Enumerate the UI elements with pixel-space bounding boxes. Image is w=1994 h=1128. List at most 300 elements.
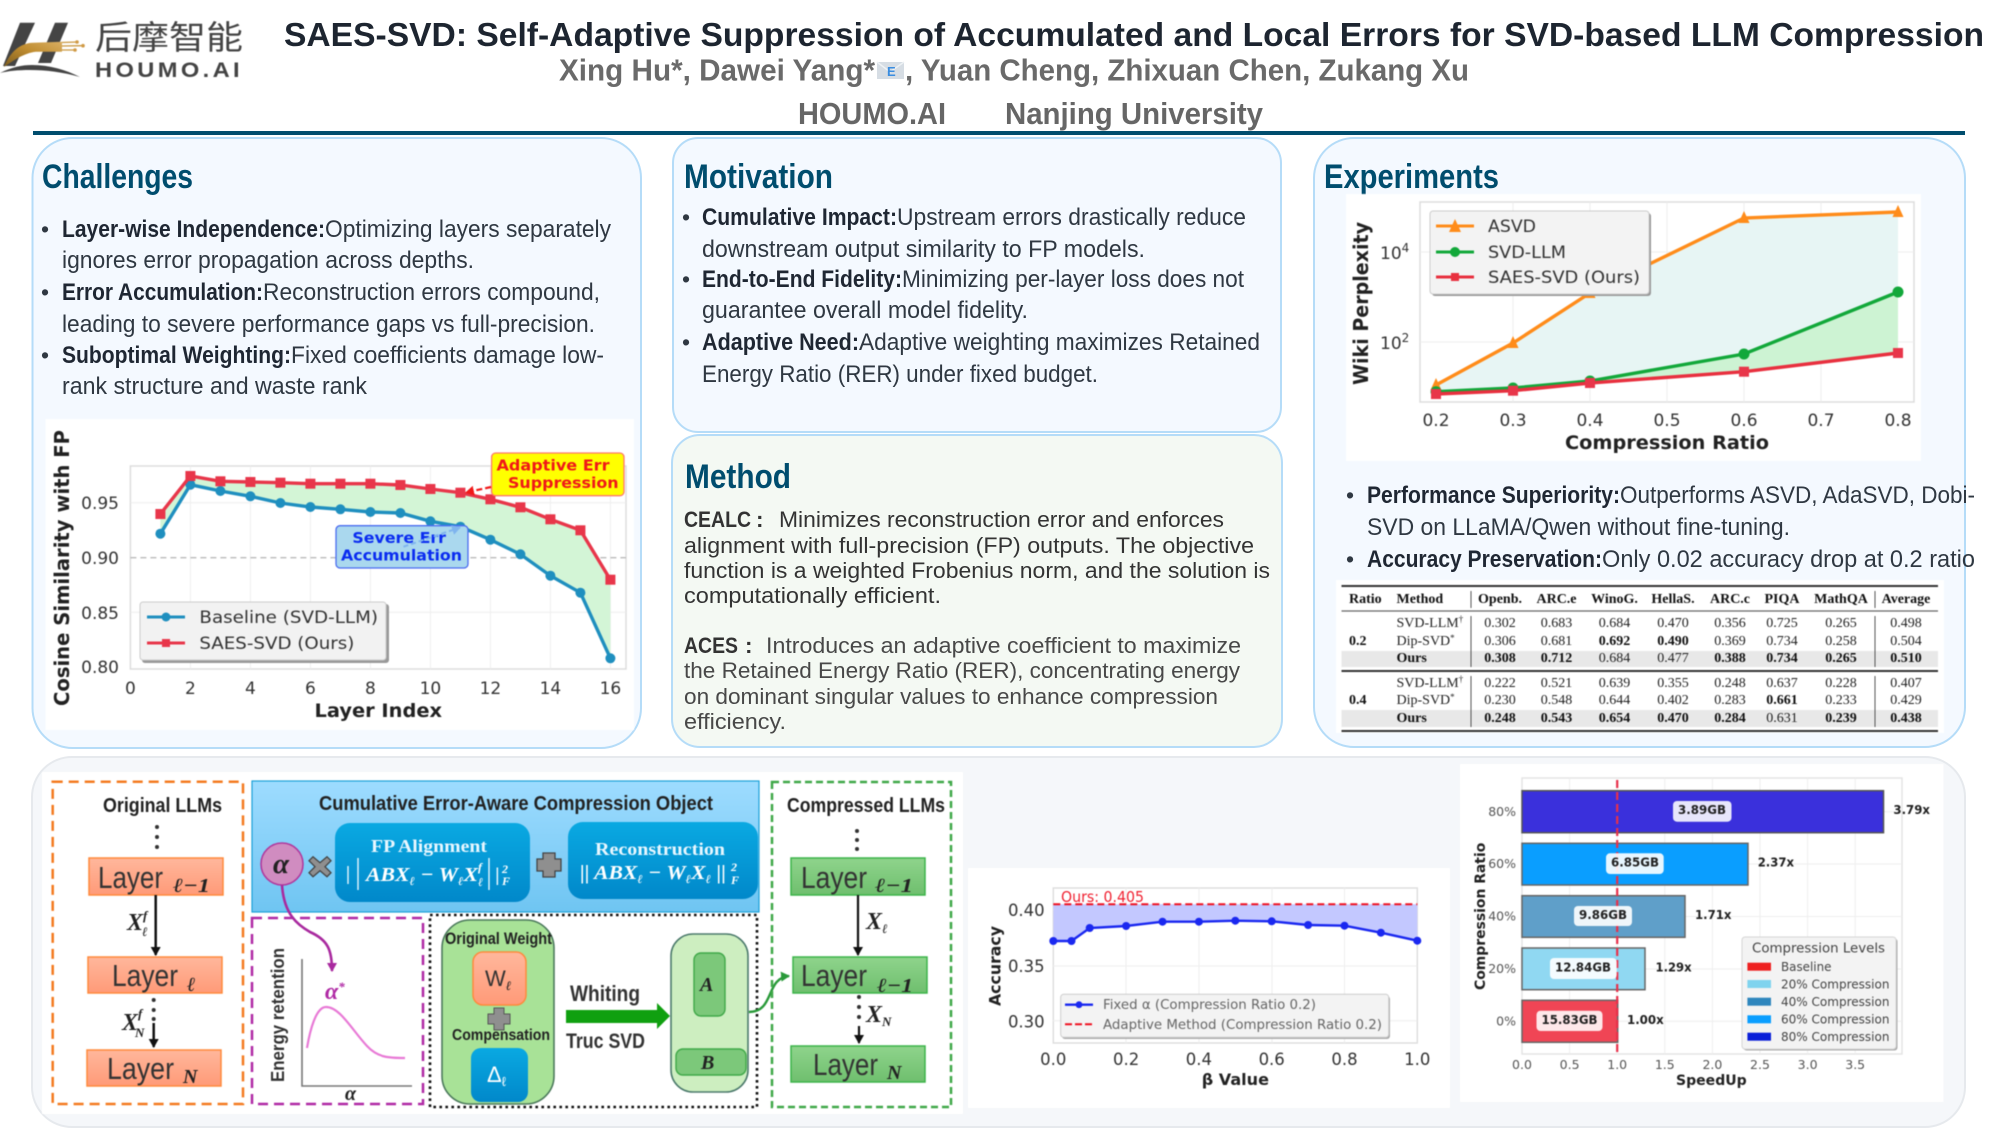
label: X l: ℓ (882, 921, 888, 936)
label: X N: X (866, 1002, 882, 1028)
text block: ACES: ACES (684, 633, 738, 658)
legend: SVD-LLM (1488, 243, 1566, 263)
layer l-1: Layer (801, 860, 867, 895)
fill between SVD-LLM and ours (1436, 292, 1898, 394)
legend (1430, 211, 1651, 296)
x tick labels (1040, 1050, 1430, 1069)
arrow (152, 1023, 155, 1047)
icon: H mark (0, 23, 85, 77)
x axis title: Compression Ratio (1565, 432, 1769, 454)
series: baseline (160, 485, 610, 658)
x tick labels: 6 (305, 679, 316, 699)
table rows: ratio 0.2: 0.369 (1714, 634, 1746, 649)
arrow (858, 1026, 860, 1043)
legend: compression levels: Baseline (1781, 959, 1832, 974)
FP alignment term: f (478, 860, 483, 874)
x tick labels: 0.0 (1040, 1050, 1066, 1069)
label: truc svd: Truc SVD (566, 1030, 645, 1053)
legend (1061, 994, 1390, 1039)
layer N (87, 1050, 221, 1088)
text block: CEALC: Minimizes reconstruction error and enforces (779, 507, 1224, 532)
table rows: ratio 0.4: * (1450, 692, 1455, 702)
arrow: alpha to optimum (282, 885, 332, 971)
authors (559, 54, 1469, 88)
table rows: ratio 0.4: 0.233 (1825, 693, 1857, 708)
table rows: ratio 0.2: 0.265 (1825, 616, 1857, 631)
text block: experiments bullets: SVD on LLaMA/Qwen without fine-tuning. (1367, 514, 1790, 541)
reconstruction term: − W (643, 862, 687, 884)
legend: ASVD (1488, 217, 1536, 237)
layer l-1 second (793, 957, 927, 997)
label: X f N: f (138, 1006, 144, 1021)
y tick labels (1008, 901, 1045, 1032)
y tick labels: 0.30 (1008, 1013, 1045, 1032)
bar: 40% (1522, 896, 1685, 937)
y tick labels: 60% (1488, 856, 1516, 871)
arrow: factors to compressed layer (749, 976, 789, 1012)
heading: Experiments: Experiments (1324, 158, 1499, 196)
x tick labels (125, 679, 621, 699)
table rows: ratio 0.2: 0.504 (1890, 634, 1922, 649)
panel: motivation (673, 138, 1281, 432)
table rows: ratio 0.2: 0.692 (1599, 634, 1630, 649)
text block: experiments bullets (1346, 482, 1975, 573)
table rows: ratio 0.4: † (1459, 674, 1464, 684)
y tick labels: 4 (1402, 241, 1409, 255)
label: X N: N (881, 1014, 892, 1029)
layer l-1 second: Layer (801, 958, 867, 993)
label: X f l: f (143, 908, 149, 923)
reconstruction term: ℓ (706, 872, 711, 886)
reference line: adaptive method (1053, 903, 1417, 905)
text block: CEALC: : (756, 507, 764, 532)
y axis title: Cosine Similarity with FP (50, 430, 74, 706)
table rows: ratio 0.2: Ours (1396, 651, 1427, 666)
speedup labels: 1.29x (1656, 960, 1692, 975)
text block: CEALC: CEALC (684, 507, 751, 532)
original weight and compensation: ℓ (502, 1074, 507, 1089)
FP alignment term: FP Alignment (371, 836, 487, 856)
table rows: ratio 0.2: 0.2 (1349, 634, 1366, 649)
x tick labels: 4 (245, 679, 256, 699)
FP alignment term: | (495, 865, 500, 885)
x tick labels: 0.4 (1576, 411, 1604, 431)
group: weight decomposition (430, 915, 757, 1107)
legend: Baseline (SVD-LLM) (199, 608, 378, 628)
layer N: Layer (107, 1051, 174, 1086)
table header: Average (1882, 592, 1930, 607)
y tick labels: 10 (1380, 334, 1402, 354)
table rows: ratio 0.4: 0.548 (1541, 693, 1572, 708)
callout: adaptive error suppression: Adaptive Err (496, 457, 610, 475)
label: whiting: Whiting (570, 981, 640, 1006)
reconstruction term: || ABX (580, 862, 633, 884)
factors A and B: B (700, 1052, 714, 1074)
table rows: ratio 0.2: 0.388 (1714, 651, 1746, 666)
x tick labels: 0.8 (1331, 1050, 1358, 1069)
table header: WinoG. (1591, 592, 1638, 607)
table rows: ratio 0.2: 0.683 (1541, 616, 1572, 631)
x tick labels (1422, 411, 1912, 431)
speedup labels: 2.37x (1758, 855, 1794, 870)
table rows: ratio 0.4: 0.239 (1825, 711, 1857, 726)
table rows: ratio 0.2: 0.684 (1599, 616, 1630, 631)
text block: motivation bullets: Upstream errors drastically reduce (897, 204, 1246, 231)
speedup labels: 3.79x (1893, 802, 1930, 817)
bar chart: speedup (1460, 764, 1944, 1102)
table rows: ratio 0.4: SVD-LLM (1396, 676, 1459, 691)
icon: alpha coefficient: α (273, 848, 290, 880)
text block: experiments bullets: • (1346, 546, 1354, 572)
text block: CEALC (684, 507, 1270, 608)
label: X f l: X (126, 910, 144, 936)
legend: compression levels (1742, 937, 1898, 1050)
text block: CEALC: function is a weighted Frobenius norm, and the solution is (684, 558, 1270, 583)
FP alignment term: 2 (501, 862, 508, 876)
group: energy retention: * (338, 979, 345, 994)
layer l: ℓ (187, 974, 196, 996)
group: energy retention (252, 918, 423, 1105)
layer l-1 second: ℓ−1 (877, 975, 913, 997)
annotation: ours value: Ours: 0.405 (1061, 888, 1144, 906)
x tick labels: 1.5 (1655, 1057, 1675, 1072)
legend: compression levels: 80% Compression (1781, 1029, 1890, 1044)
text block: challenges bullets: ignores error propagation across depths. (62, 247, 474, 274)
text block: motivation bullets: Energy Ratio (RER) under fixed budget. (702, 361, 1098, 388)
reconstruction term: X (690, 862, 706, 884)
text block: challenges bullets: • (41, 342, 49, 368)
FP alignment term: ABX (366, 864, 406, 886)
text block: ACES: Introduces an adaptive coefficient to maximize (766, 633, 1241, 658)
text block: motivation bullets (682, 204, 1260, 388)
arrow: green (566, 1003, 670, 1029)
y axis title: Compression Ratio (1473, 842, 1489, 990)
legend (140, 602, 389, 663)
table rows: ratio 0.4: 0.4 (1349, 693, 1366, 708)
table rows: ratio 0.2: 0.734 (1766, 651, 1798, 666)
affiliations: HOUMO.AI (798, 97, 946, 131)
logo wordmark Chinese: 后摩智能 (95, 19, 243, 56)
text block: challenges bullets: Optimizing layers separately (325, 216, 611, 243)
text block: motivation bullets: • (682, 204, 690, 230)
icon: multiply (309, 857, 331, 877)
table rows: ratio 0.4 (1349, 674, 1922, 726)
y tick labels: 0.80 (81, 658, 119, 678)
table rows: ratio 0.4: 0.230 (1484, 693, 1516, 708)
legend: compression levels: 40% Compression (1781, 994, 1890, 1009)
original weight and compensation: W (485, 966, 506, 991)
y axis title: Wiki Perplexity (1349, 222, 1373, 385)
FP alignment term: − W (415, 864, 459, 886)
y tick labels: 0.90 (81, 549, 119, 569)
y tick labels: 10 (1380, 244, 1402, 264)
callout: severe error accumulation (336, 526, 468, 568)
layer l: Layer (112, 958, 178, 993)
text block: experiments bullets: Performance Superiority: (1367, 482, 1620, 509)
x tick labels: 0 (125, 679, 136, 699)
label: X f N (121, 1006, 145, 1040)
x axis title: SpeedUp (1676, 1073, 1747, 1089)
table rows: ratio 0.4: 0.228 (1825, 676, 1857, 691)
text block: CEALC: computationally efficient. (684, 583, 941, 608)
table rows: ratio 0.4: 0.470 (1657, 711, 1689, 726)
legend: compression levels: Compression Levels (1752, 942, 1885, 957)
text block: experiments bullets: Accuracy Preservation: (1367, 546, 1602, 573)
x tick labels: 2.0 (1702, 1057, 1722, 1072)
x tick labels (1512, 1057, 1865, 1072)
FP alignment term: X (462, 864, 479, 886)
table header: ARC.c (1710, 592, 1750, 607)
table rows: ratio 0.2 (1349, 614, 1922, 666)
x tick labels: 0.8 (1884, 411, 1912, 431)
text block: motivation bullets: Adaptive weighting maximizes Retained (859, 329, 1260, 356)
table rows: ratio 0.4: 0.644 (1599, 693, 1630, 708)
table rows: ratio 0.4: 0.407 (1890, 676, 1922, 691)
text block: motivation bullets: End-to-End Fidelity: (702, 266, 902, 293)
text block: challenges bullets: • (41, 279, 49, 305)
table rows: ratio 0.4: Ours (1396, 711, 1427, 726)
table rows: ratio 0.4: Dip-SVD (1396, 693, 1450, 708)
text block: ACES: the Retained Energy Ratio (RER), concentrating energy (684, 658, 1240, 683)
original weight and compensation: Δ (487, 1062, 502, 1087)
arrow (154, 895, 157, 955)
x tick labels: 0.5 (1653, 411, 1681, 431)
heading: Motivation: Motivation (684, 158, 833, 196)
x tick labels: 0.4 (1186, 1050, 1212, 1069)
text block: challenges bullets: Layer-wise Independence: (62, 216, 325, 243)
label: X f l: ℓ (142, 924, 148, 939)
x tick labels: 0.0 (1512, 1057, 1532, 1072)
y tick labels: 0.35 (1008, 957, 1045, 976)
x tick labels: 3.0 (1798, 1057, 1818, 1072)
callout: adaptive error suppression (466, 453, 624, 496)
table header: MathQA (1814, 592, 1869, 607)
callout: severe error accumulation: Accumulation (341, 547, 462, 565)
x tick labels: 8 (365, 679, 376, 699)
x tick labels: 10 (420, 679, 441, 699)
FP alignment term: ℓ (478, 875, 483, 889)
legend: Adaptive Method (Compression Ratio 0.2) (1103, 1017, 1382, 1033)
group: original LLMs (53, 782, 243, 1104)
table rows: ratio 0.2: 0.725 (1766, 616, 1798, 631)
factors A and B (671, 934, 748, 1092)
table rows: ratio 0.2: 0.490 (1657, 634, 1689, 649)
x tick labels: 0.3 (1499, 411, 1527, 431)
group: compressed LLMs: Compressed LLMs (787, 795, 945, 817)
arrow (857, 895, 859, 955)
x axis title: β Value (1202, 1070, 1269, 1089)
bar: 60% (1522, 843, 1748, 885)
series: SVD-LLM (1436, 292, 1898, 392)
FP alignment term: F (501, 874, 510, 888)
legend: compression levels: 20% Compression (1781, 976, 1890, 992)
y tick labels: 80% (1488, 804, 1516, 819)
table header: Openb. (1478, 592, 1522, 607)
authors: , Yuan Cheng, Zhixuan Chen, Zukang Xu (905, 54, 1469, 88)
line chart: cosine similarity by layer (46, 419, 634, 730)
table rows: ratio 0.4: 0.222 (1484, 676, 1516, 691)
table rows: ratio 0.2: 0.734 (1766, 634, 1798, 649)
y tick labels (1380, 241, 1409, 354)
text block: ACES: : (745, 633, 752, 658)
heading: Challenges: Challenges (42, 158, 193, 196)
text block: challenges bullets: rank structure and waste rank (62, 373, 368, 400)
fill between ASVD and SVD-LLM (1436, 212, 1898, 392)
y tick labels: 0.85 (81, 604, 119, 624)
table: benchmark accuracy (1336, 580, 1944, 733)
reconstruction term: || (711, 862, 726, 884)
label: X l: X (866, 909, 882, 935)
authors: Xing Hu*, Dawei Yang* (559, 54, 875, 88)
table rows: ratio 0.4: 0.639 (1599, 676, 1630, 691)
layer l-1 (791, 858, 925, 897)
icon: alpha coefficient (261, 843, 303, 885)
legend: compression levels: 60% Compression (1781, 1012, 1890, 1026)
text block: challenges bullets (41, 216, 611, 400)
layer l-1: Layer (98, 860, 163, 895)
table rows: ratio 0.2: 0.258 (1825, 634, 1857, 649)
series: SAES-SVD (160, 476, 610, 580)
text block: motivation bullets: • (682, 329, 690, 355)
reconstruction term: ℓ (637, 872, 643, 886)
original weight and compensation: Original Weight (445, 929, 552, 948)
table header: HellaS. (1651, 592, 1695, 607)
text block: challenges bullets: Suboptimal Weighting: (62, 342, 291, 369)
x tick labels: 0.6 (1730, 411, 1758, 431)
table rows: ratio 0.2: 0.712 (1541, 651, 1572, 666)
y tick labels: 0.40 (1008, 901, 1045, 920)
x tick labels: 1.0 (1404, 1050, 1430, 1069)
text block: experiments bullets: Outperforms ASVD, AdaSVD, Dobi- (1620, 482, 1975, 509)
text block: experiments bullets: Only 0.02 accuracy drop at 0.2 ratio (1602, 546, 1975, 573)
panel: experiments (1314, 138, 1975, 747)
reconstruction term: F (730, 873, 739, 887)
reconstruction term (568, 822, 758, 899)
diagram: framework overview (42, 772, 963, 1114)
original weight and compensation: Compensation (452, 1027, 550, 1044)
table rows: ratio 0.2: 0.356 (1714, 616, 1746, 631)
panel: bottom figures (32, 757, 1965, 1127)
text block: ACES (684, 633, 1241, 734)
y tick labels (1488, 804, 1516, 1029)
x tick labels: 16 (600, 679, 621, 699)
line chart: accuracy vs beta (968, 868, 1450, 1108)
table rows: ratio 0.4: 0.402 (1657, 693, 1689, 708)
speedup labels (1627, 802, 1930, 1027)
panel: challenges (32, 138, 641, 748)
group: original LLMs: Original LLMs (103, 795, 222, 817)
callout: severe error accumulation: Severe Err (352, 529, 446, 547)
table rows: ratio 0.2: 0.510 (1890, 651, 1922, 666)
table rows: ratio 0.2: 0.684 (1599, 651, 1630, 666)
x tick labels: 3.5 (1845, 1057, 1865, 1072)
text block: experiments bullets: • (1346, 482, 1354, 508)
series: ASVD (1436, 212, 1898, 385)
layer l-1 (89, 858, 223, 897)
y axis title: Accuracy (986, 925, 1005, 1006)
x tick labels: 0.6 (1259, 1050, 1285, 1069)
FP alignment term (335, 823, 530, 902)
label: X f N: X (121, 1010, 139, 1036)
y tick labels: 40% (1488, 909, 1516, 924)
logo: HOUMO.AI (0, 19, 243, 82)
table rows: ratio 0.4: 0.248 (1714, 676, 1746, 691)
speedup labels: 1.71x (1695, 907, 1732, 922)
text block: ACES: on dominant singular values to enhance compression (684, 684, 1218, 709)
gap fill (1053, 904, 1417, 941)
group: compression objective: Cumulative Error-Aware Compression Object (319, 793, 713, 815)
icon: plus (537, 853, 561, 877)
layer N: N (182, 1066, 199, 1088)
text block: CEALC: alignment with full-precision (FP) outputs. The objective (684, 533, 1254, 558)
y tick labels: 0.95 (81, 494, 119, 514)
y tick labels (81, 494, 119, 678)
x tick labels: 14 (540, 679, 561, 699)
size labels: 3.89GB (1678, 802, 1726, 817)
table rows: ratio 0.2: 0.265 (1825, 651, 1857, 666)
group: energy retention: α (325, 979, 338, 1005)
table rows: ratio 0.2: 0.302 (1484, 616, 1516, 631)
table rows: ratio 0.2: † (1459, 614, 1464, 624)
speedup labels: 1.00x (1627, 1012, 1664, 1027)
text block: motivation bullets: Cumulative Impact: (702, 204, 897, 231)
icon: email: E (887, 64, 896, 79)
callout: adaptive error suppression: Suppression (508, 474, 619, 492)
x tick labels: 2.5 (1750, 1057, 1770, 1072)
x axis title: Layer Index (314, 700, 442, 722)
table rows: ratio 0.2: * (1450, 633, 1455, 643)
reconstruction term: ℓ (686, 872, 691, 886)
title: SAES-SVD: Self-Adaptive Suppression of Accumulated and Local Errors for SVD-based LLM Compression (284, 17, 1984, 54)
y tick labels: 2 (1402, 331, 1409, 345)
text block: motivation bullets: Adaptive Need: (702, 329, 859, 356)
table rows: ratio 0.2: 0.308 (1484, 651, 1516, 666)
line chart: wiki perplexity (1346, 194, 1921, 461)
table rows: ratio 0.4: 0.543 (1541, 711, 1572, 726)
baseline reference line (1616, 780, 1618, 1054)
table rows: ratio 0.4: 0.661 (1766, 693, 1798, 708)
bar: 0% (1522, 1000, 1618, 1042)
table rows: ratio 0.4: 0.631 (1766, 711, 1798, 726)
text block: motivation bullets: • (682, 266, 690, 292)
text block: motivation bullets: downstream output similarity to FP models. (702, 236, 1145, 263)
table rows: ratio 0.2: 0.470 (1657, 616, 1689, 631)
FP alignment term: ℓ (409, 874, 415, 888)
size labels: 15.83GB (1542, 1012, 1598, 1027)
x tick labels: 2 (185, 679, 196, 699)
table rows: ratio 0.2: Dip-SVD (1396, 634, 1450, 649)
layer N (791, 1046, 925, 1084)
legend: SAES-SVD (Ours) (1488, 268, 1640, 288)
icon: email (877, 62, 904, 79)
table rows: ratio 0.4: 0.283 (1714, 693, 1746, 708)
size labels: 12.84GB (1555, 960, 1611, 975)
size labels (1536, 801, 1732, 1031)
bar: 80% (1522, 791, 1884, 833)
table rows: ratio 0.2: 0.306 (1484, 634, 1516, 649)
table rows: ratio 0.4: 0.438 (1890, 711, 1922, 726)
size labels: 6.85GB (1611, 855, 1659, 870)
x tick labels: 0.2 (1113, 1050, 1139, 1069)
table rows: ratio 0.2: 0.681 (1541, 634, 1572, 649)
series: fixed alpha (1053, 921, 1417, 941)
group: energy retention: α (345, 1083, 357, 1105)
heading: Method: Method (685, 458, 791, 496)
x tick labels: 0.2 (1422, 411, 1450, 431)
affiliations (798, 97, 1263, 131)
table rows: ratio 0.2: 0.498 (1890, 616, 1922, 631)
table rows: ratio 0.4: 0.248 (1484, 711, 1516, 726)
